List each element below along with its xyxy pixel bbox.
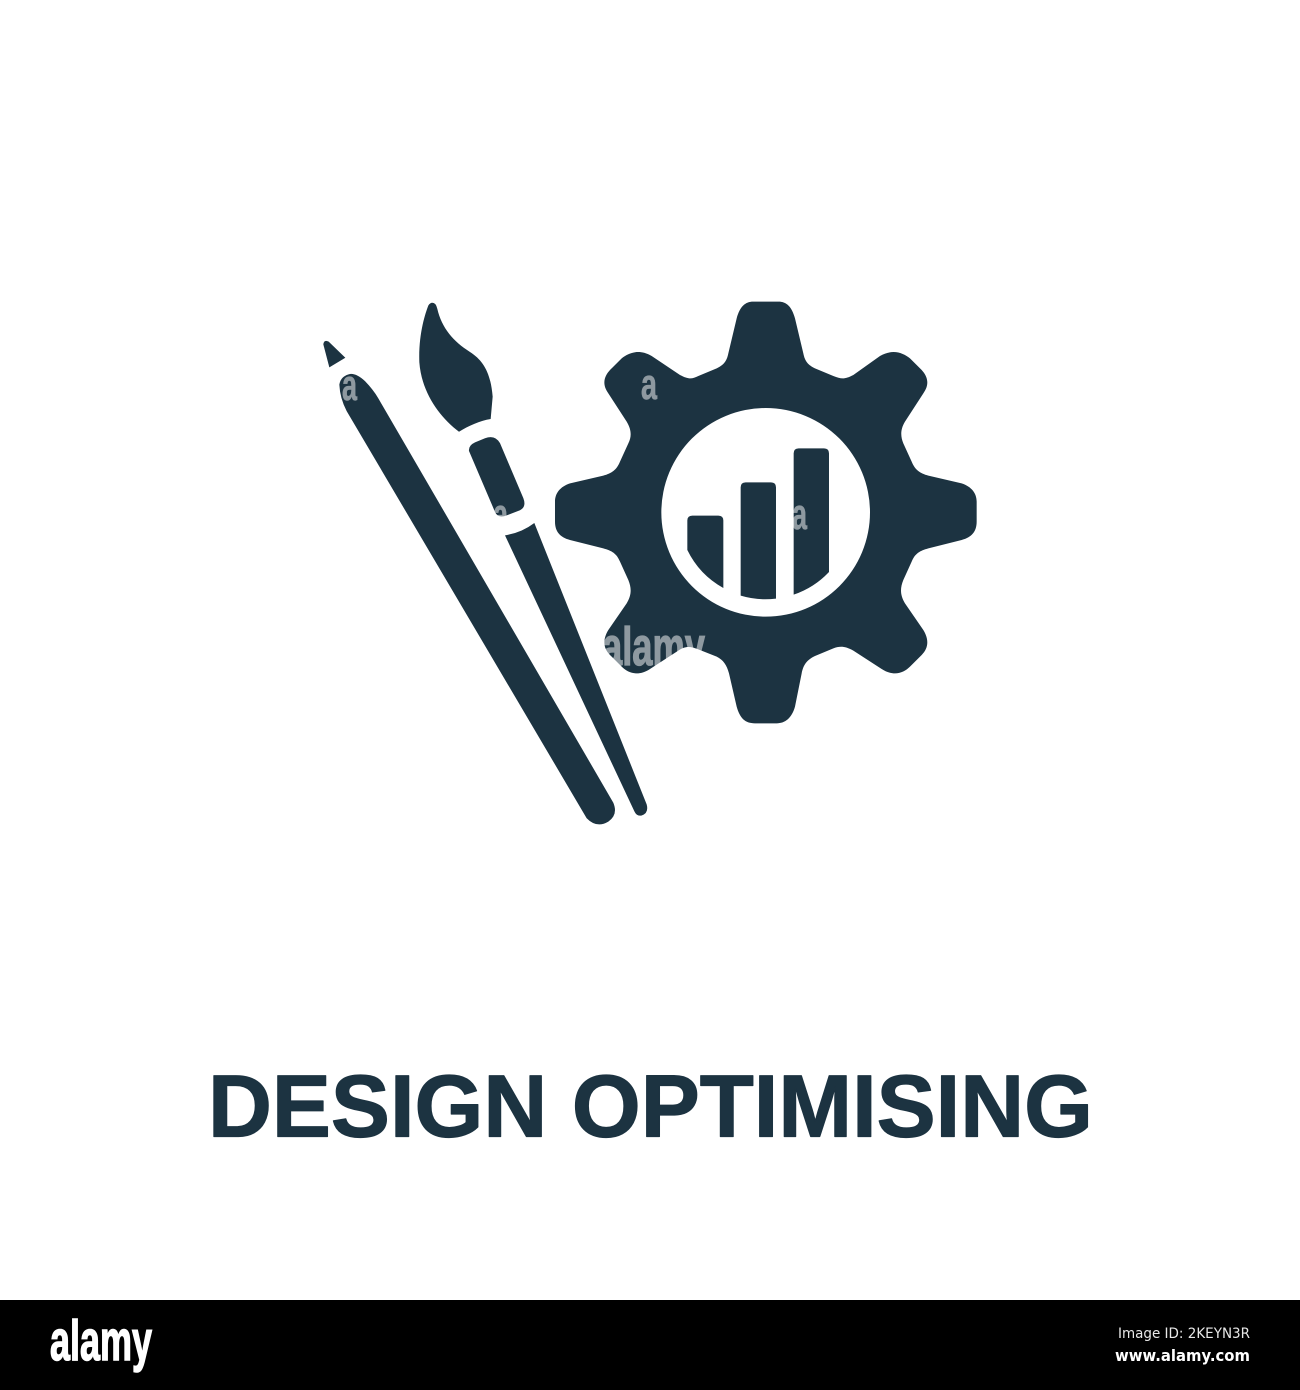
watermark fragments: alamy (602, 617, 705, 677)
footer logo: alamy (50, 1309, 152, 1373)
watermark fragments (342, 360, 807, 677)
title: DESIGN OPTIMISING (208, 1056, 1093, 1156)
bar chart (687, 448, 829, 599)
watermark fragments: a (493, 490, 508, 539)
image id: Image ID: 2KEYN3R (1118, 1326, 1250, 1342)
icon: pencil (323, 341, 615, 824)
watermark fragments: a (641, 360, 657, 409)
watermark fragments: a (792, 490, 807, 539)
icon: gear with bar chart (555, 302, 977, 723)
footer bar (0, 1300, 1300, 1390)
website: www.alamy.com (1115, 1346, 1250, 1365)
gear body (555, 302, 977, 723)
icon: paintbrush (419, 303, 647, 816)
watermark fragments: a (342, 361, 357, 410)
